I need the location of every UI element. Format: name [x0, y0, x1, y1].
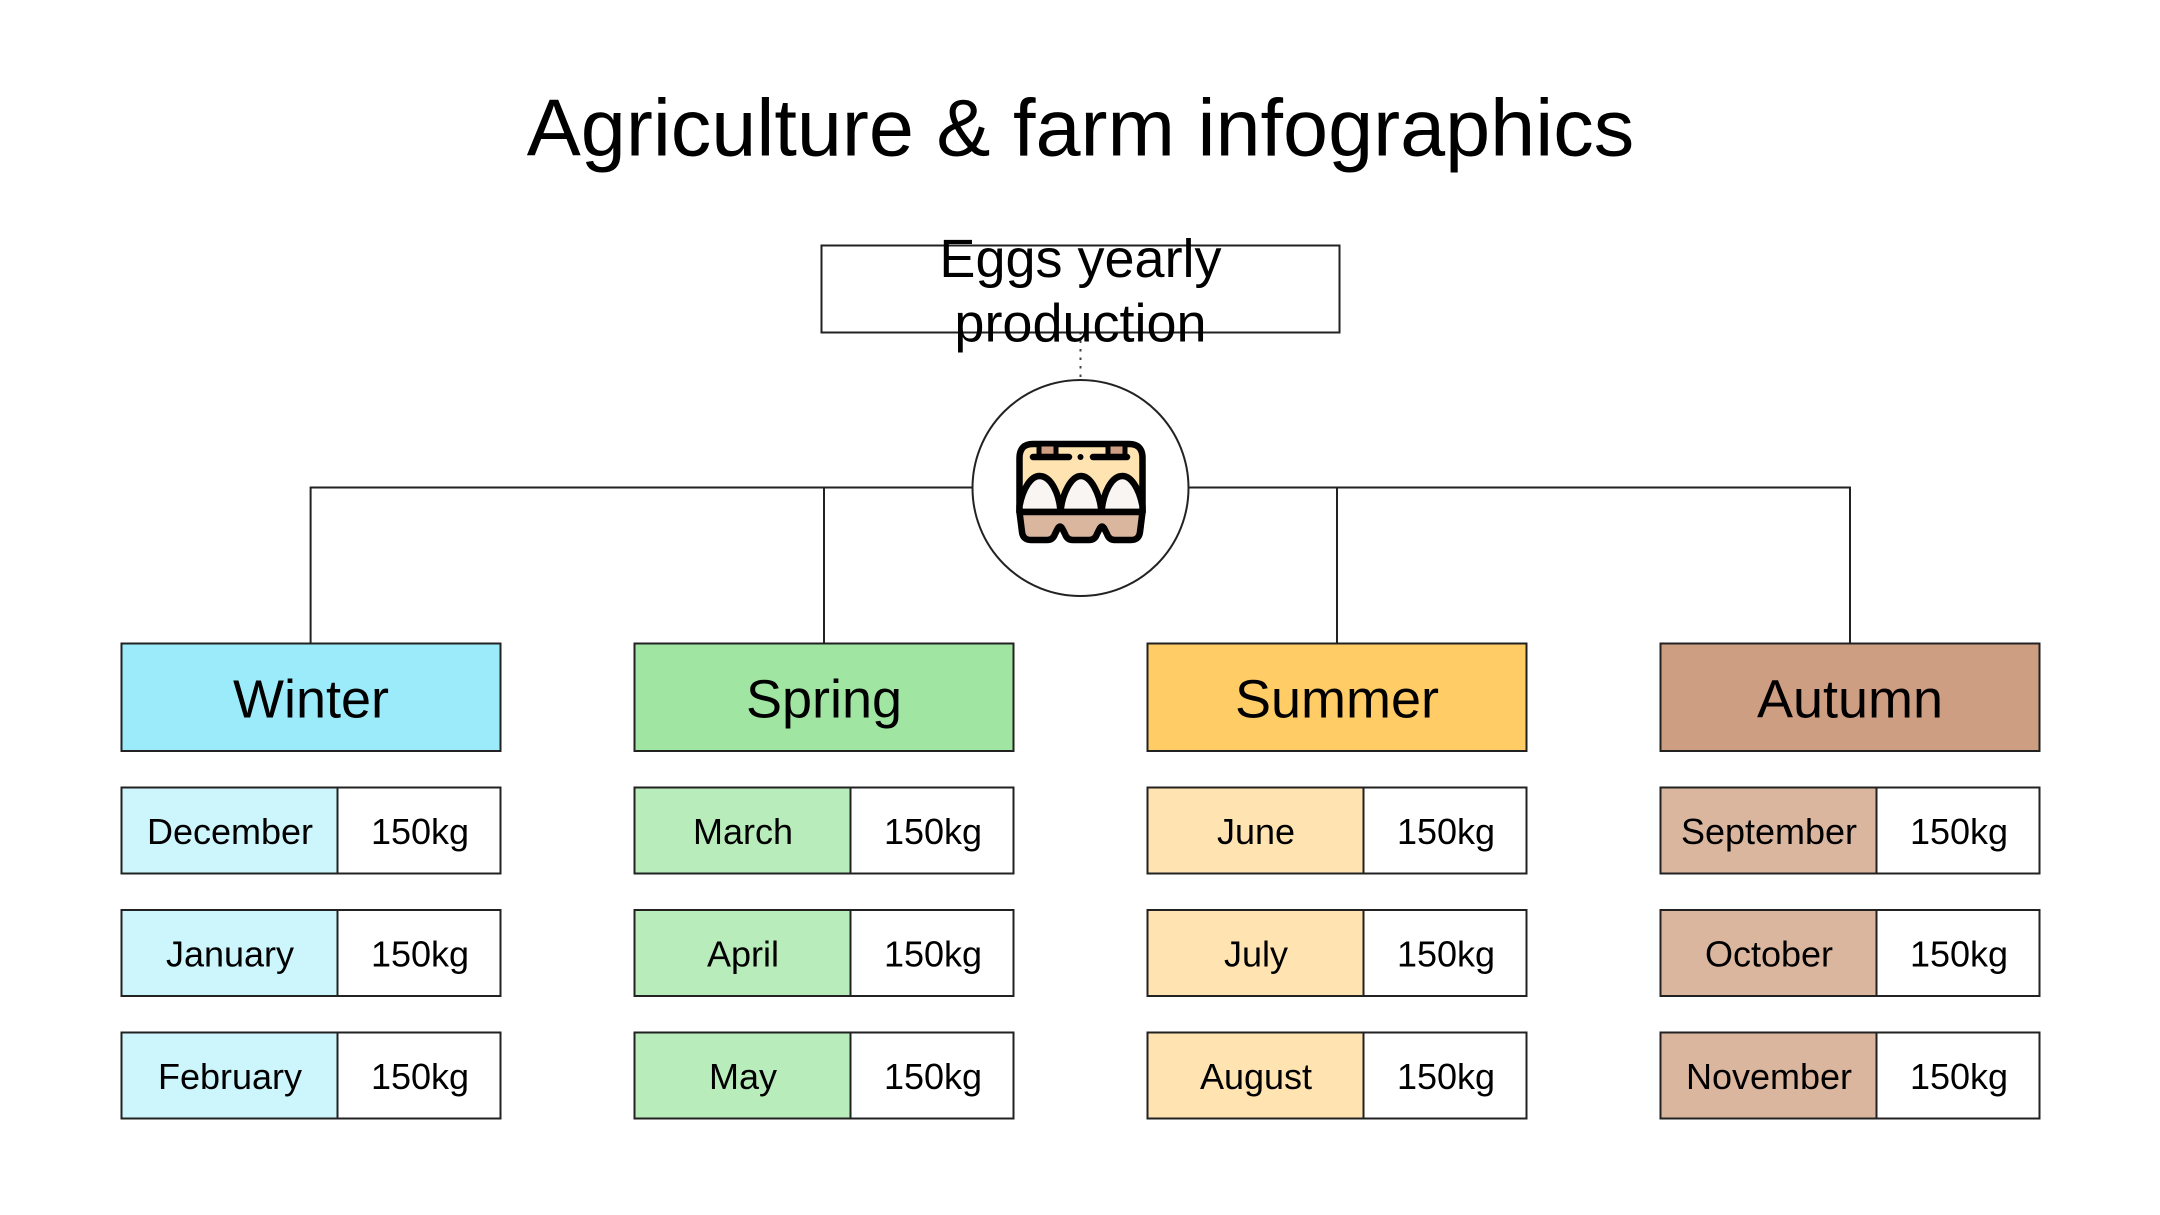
- heading: Autumn: [1660, 644, 2040, 751]
- row: October: 150kg: [1910, 934, 2008, 974]
- heading: Summer: [1148, 644, 1526, 751]
- heading: Spring: Spring: [746, 670, 902, 730]
- row: March: 150kg: [884, 811, 982, 852]
- row: May: [634, 1032, 1014, 1118]
- subtitle box: Eggs yearly production: Eggs yearly: [939, 229, 1222, 289]
- subtitle box: Eggs yearly production: production: [954, 294, 1207, 354]
- panel: Winter: [122, 644, 500, 1118]
- row: November: November: [1686, 1056, 1852, 1097]
- row: September: [1660, 788, 2040, 874]
- row: January: 150kg: [371, 934, 469, 974]
- row: October: [1660, 910, 2040, 996]
- row: September: September: [1681, 811, 1857, 852]
- row: February: 150kg: [371, 1056, 469, 1097]
- row: May: 150kg: [884, 1056, 982, 1097]
- row: February: February: [158, 1056, 302, 1097]
- row: January: January: [166, 934, 294, 974]
- subtitle box: Eggs yearly production: [822, 229, 1340, 354]
- row: November: 150kg: [1910, 1056, 2008, 1097]
- row: August: August: [1200, 1056, 1312, 1097]
- icon: egg carton: [1020, 444, 1142, 540]
- row: November: [1660, 1032, 2040, 1118]
- heading: Spring: [634, 644, 1014, 751]
- row: March: [634, 788, 1014, 874]
- panel: Spring: [634, 644, 1014, 1118]
- row: December: 150kg: [371, 811, 469, 852]
- row: December: December: [147, 811, 313, 852]
- row: April: [634, 910, 1014, 996]
- heading: Winter: [122, 644, 500, 751]
- row: June: [1148, 788, 1526, 874]
- row: July: [1148, 910, 1526, 996]
- row: June: June: [1217, 811, 1295, 852]
- row: April: 150kg: [884, 934, 982, 974]
- row: August: 150kg: [1397, 1056, 1495, 1097]
- row: August: [1148, 1032, 1526, 1118]
- row: October: October: [1705, 934, 1833, 974]
- row: June: 150kg: [1397, 811, 1495, 852]
- heading: Summer: Summer: [1235, 670, 1439, 730]
- icon circle with egg carton: [972, 380, 1188, 596]
- row: September: 150kg: [1910, 811, 2008, 852]
- panel: Summer: [1148, 644, 1526, 1118]
- panel: Autumn: [1660, 644, 2040, 1118]
- heading: Autumn: Autumn: [1757, 670, 1943, 730]
- row: April: April: [707, 934, 779, 974]
- row: May: May: [709, 1056, 777, 1097]
- row: March: March: [693, 811, 793, 852]
- row: July: 150kg: [1397, 934, 1495, 974]
- row: December: [122, 788, 500, 874]
- row: January: [122, 910, 500, 996]
- row: February: [122, 1032, 500, 1118]
- row: July: July: [1224, 934, 1288, 974]
- connector lines: [311, 332, 1850, 643]
- title: Agriculture & farm infographics: [527, 84, 1634, 174]
- heading: Winter: Winter: [233, 670, 389, 730]
